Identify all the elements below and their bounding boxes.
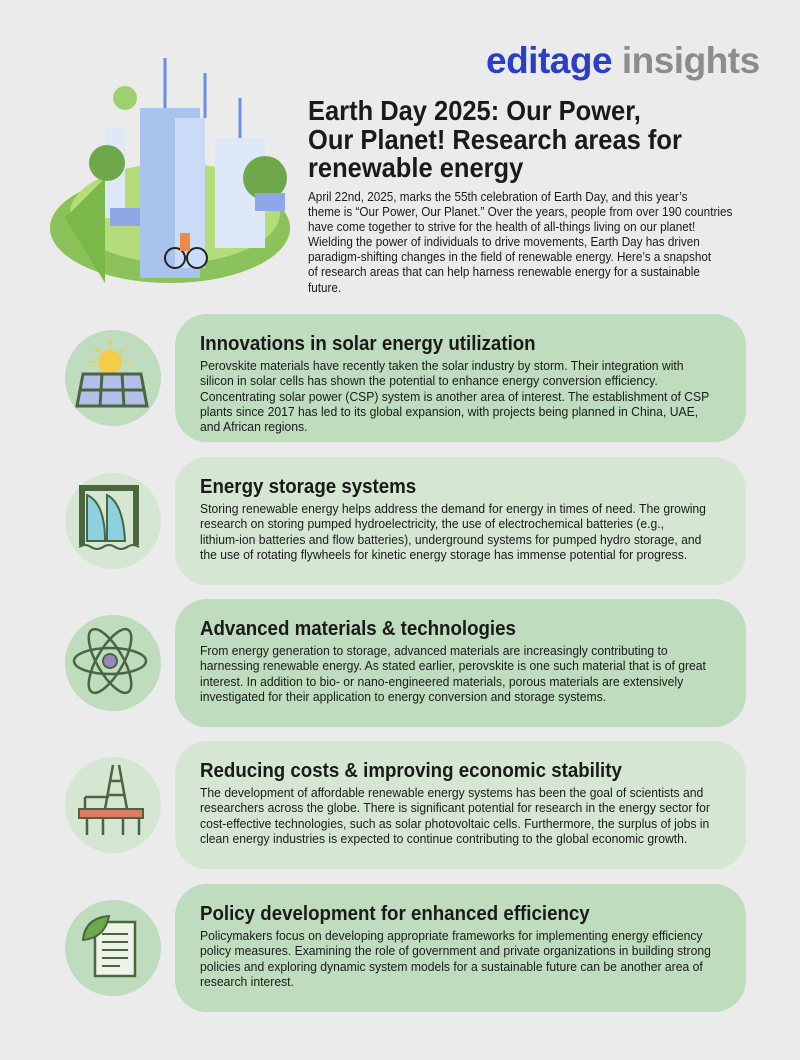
icon: dam — [65, 473, 161, 569]
panel: solar: plants since 2017 has led to its global expansion, with projects being planned in China, UAE, — [200, 404, 698, 419]
intro text: theme is “Our Power, Our Planet.” Over the years, people from over 190 countries — [308, 204, 732, 219]
panel: solar: silicon in solar cells has shown the potential to enhance energy conversion efficiency. — [200, 373, 658, 388]
panel: storage: Storing renewable energy helps address the demand for energy in times of need. The growing — [200, 501, 706, 516]
panel: policy: policies and exploring dynamic system models for a sustainable future can be another area of — [200, 959, 703, 974]
icon: solar panel — [65, 330, 161, 426]
panel: materials: investigated for their application to energy conversion and storage systems. — [200, 689, 606, 704]
panel: costs: cost-effective technologies, such as solar photovoltaic cells. Furthermore, the surplus of jobs in — [200, 816, 709, 831]
panel: materials: harnessing renewable energy. As stated earlier, perovskite is one such material that is of great — [200, 658, 706, 673]
title — [308, 95, 682, 183]
intro text: April 22nd, 2025, marks the 55th celebration of Earth Day, and this year’s — [308, 189, 687, 204]
panel: materials: interest. In addition to bio- or nano-engineered materials, porous materials are extensively — [200, 674, 683, 689]
panel: storage — [175, 457, 746, 585]
panel: costs: clean energy industries is expected to continue contributing to the global economic growth. — [200, 831, 687, 846]
panel: costs: researchers across the globe. There is significant potential for research in the energy sector for — [200, 800, 710, 815]
panel: storage: lithium-ion batteries and flow batteries), underground systems for pumped hydro storage, and — [200, 532, 701, 547]
intro text: future. — [308, 280, 341, 295]
intro text — [308, 189, 732, 295]
panel: policy: policy measures. Examining the role of government and private organizations in building strong — [200, 943, 711, 958]
panel: policy: Policy development for enhanced efficiency — [200, 903, 590, 925]
panel: materials: From energy generation to storage, advanced materials are increasingly contributing to — [200, 643, 668, 658]
panel: policy: Policymakers focus on developing appropriate frameworks for implementing energy efficiency — [200, 928, 703, 943]
panel: policy — [175, 884, 746, 1012]
title: renewable energy — [308, 152, 523, 183]
panel: materials — [175, 599, 746, 727]
panel: solar: Concentrating solar power (CSP) system is another area of interest. The establishment of CSP — [200, 389, 709, 404]
title: Our Planet! Research areas for — [308, 124, 682, 154]
intro text: have come together to strive for the health of all-things living on our planet! — [308, 219, 695, 234]
panel: solar: Innovations in solar energy utilization — [200, 333, 536, 355]
panel: materials: Advanced materials & technologies — [200, 618, 516, 640]
icon: atom — [65, 615, 161, 711]
panel: costs — [175, 741, 746, 869]
icon: oil rig — [65, 757, 161, 853]
title: Earth Day 2025: Our Power, — [308, 95, 641, 126]
logo: editage insights — [486, 40, 760, 81]
intro text: of research areas that can help harness renewable energy for a sustainable — [308, 264, 700, 279]
icon: policy document — [65, 900, 161, 996]
panel: policy: research interest. — [200, 974, 294, 989]
panel: solar: and African regions. — [200, 419, 307, 434]
panel: solar: Perovskite materials have recently taken the solar industry by storm. Their integration with — [200, 358, 684, 373]
intro text: paradigm-shifting changes in the field of renewable energy. Here’s a snapshot — [308, 249, 711, 264]
illustration: green city — [50, 58, 290, 283]
panel: storage: the use of rotating flywheels for kinetic energy storage has immense potential for progress. — [200, 547, 687, 562]
intro text: Wielding the power of individuals to drive movements, Earth Day has driven — [308, 234, 700, 249]
panel: costs: Reducing costs & improving economic stability — [200, 760, 622, 782]
panel: storage: Energy storage systems — [200, 476, 416, 498]
panel: solar — [175, 314, 746, 442]
panel: costs: The development of affordable renewable energy systems has been the goal of scientists and — [200, 785, 703, 800]
panel: storage: research on storing pumped hydroelectricity, the use of electrochemical batteries (e.g., — [200, 516, 664, 531]
